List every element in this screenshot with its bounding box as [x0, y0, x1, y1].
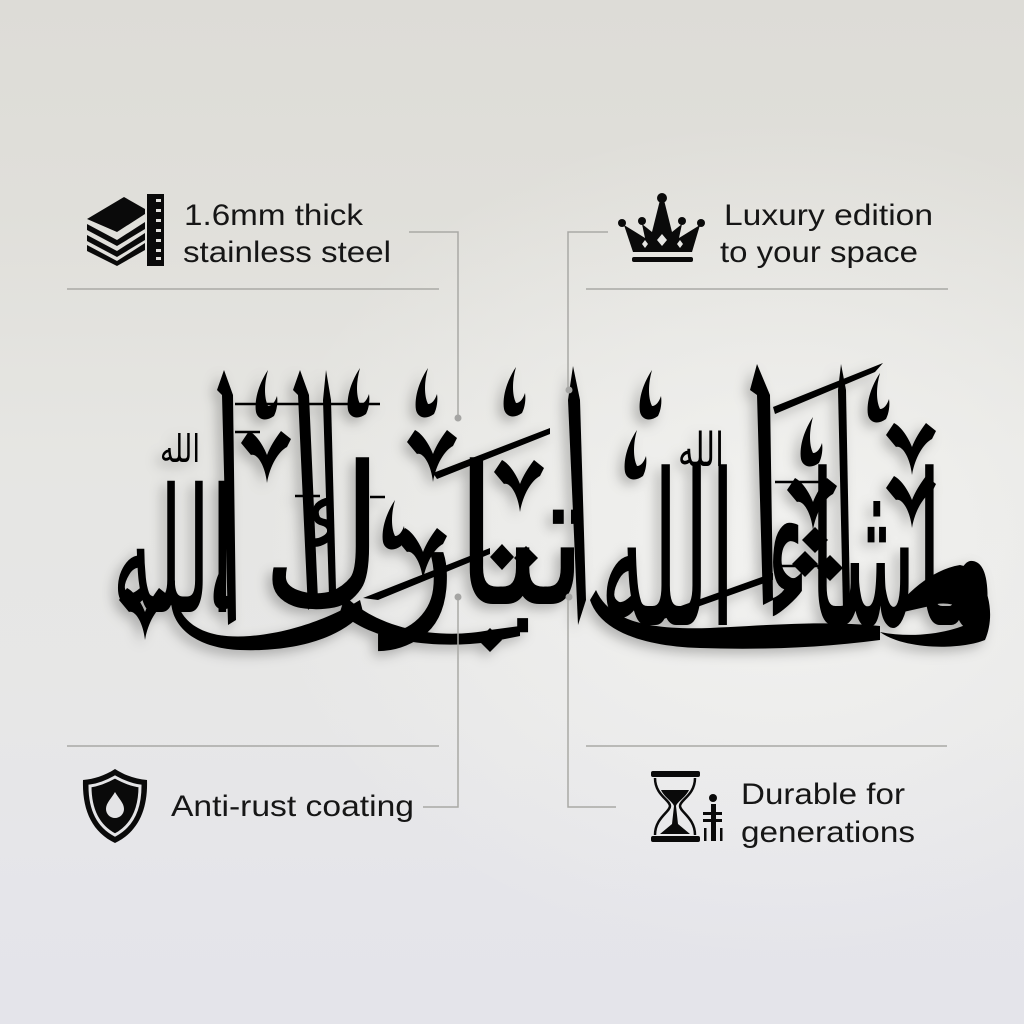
label: luxury edition: to your space: [720, 236, 918, 269]
label: anti-rust coating: Anti-rust coating: [171, 790, 414, 823]
small calligraphy: Allah, right: الله: [678, 423, 724, 477]
hook ornaments: [214, 367, 889, 609]
divider: bottom right: [586, 745, 947, 747]
small calligraphy: Allah, left: الله: [160, 426, 200, 472]
thin struts: [235, 404, 830, 566]
connector: luxury edition to artwork: [566, 232, 608, 394]
icon: stacked sheets with ruler: [87, 194, 164, 266]
diamond dots: [478, 527, 843, 652]
label: luxury edition: Luxury edition: [724, 199, 933, 232]
divider: top right: [586, 288, 948, 290]
divider: bottom left: [67, 745, 439, 747]
connector: stainless steel to artwork: [409, 232, 462, 422]
calligraphy word: tabarak: تبارك: [262, 425, 587, 651]
calligraphy word: Allah: الله: [112, 453, 234, 654]
label: durable for generations: Durable for: [741, 778, 905, 811]
connector: durable to artwork: [566, 594, 616, 807]
divider: top left: [67, 288, 439, 290]
diagonal bars: [363, 363, 883, 622]
fleur ornaments: [119, 423, 936, 640]
upright spikes: [217, 364, 850, 625]
icon: crown: [618, 193, 705, 262]
label: stainless steel: 1.6mm thick: [184, 199, 364, 232]
label: luxury edition: [720, 199, 933, 269]
label: durable for generations: generations: [741, 816, 915, 849]
label: durable for generations: [741, 778, 915, 849]
icon: shield with drop: [83, 769, 147, 843]
label: stainless steel: [183, 199, 391, 269]
sweeping strokes: [171, 565, 990, 650]
icon: hourglass and figure: [651, 771, 722, 842]
calligraphy word: masha'Allah: ماشاء الله: [600, 430, 995, 676]
wall art: Arabic calligraphy sculpture: [112, 363, 995, 676]
connector: anti-rust to artwork: [423, 594, 462, 807]
label: stainless steel: stainless steel: [183, 236, 391, 269]
